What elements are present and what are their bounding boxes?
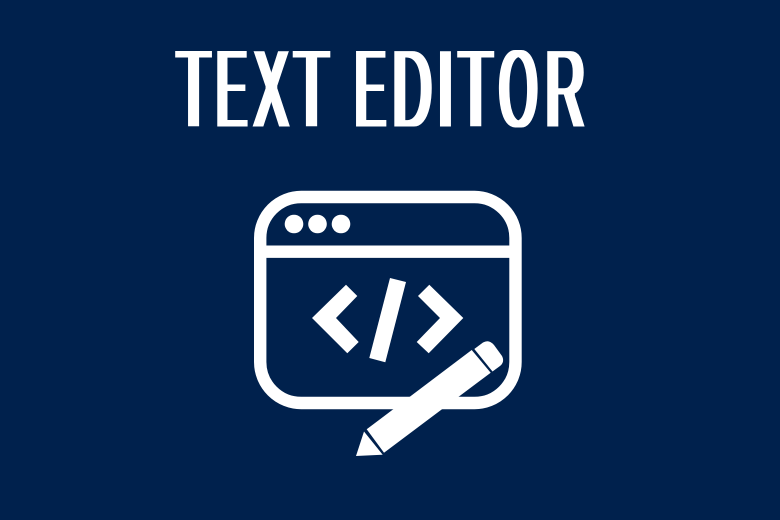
icon: code editor window with pencil [260, 197, 516, 456]
title: E [355, 27, 385, 152]
pencil [356, 341, 503, 456]
infographic canvas: R [546, 27, 585, 152]
window control dots [285, 215, 350, 233]
title: D [393, 27, 431, 152]
code symbol [312, 278, 463, 362]
title: I [438, 27, 453, 152]
title: O [500, 27, 537, 152]
title: E [217, 27, 246, 152]
title: T [459, 27, 493, 152]
title: T [177, 27, 210, 152]
title: X [254, 27, 289, 152]
window frame [260, 197, 516, 403]
title: T [294, 27, 328, 152]
